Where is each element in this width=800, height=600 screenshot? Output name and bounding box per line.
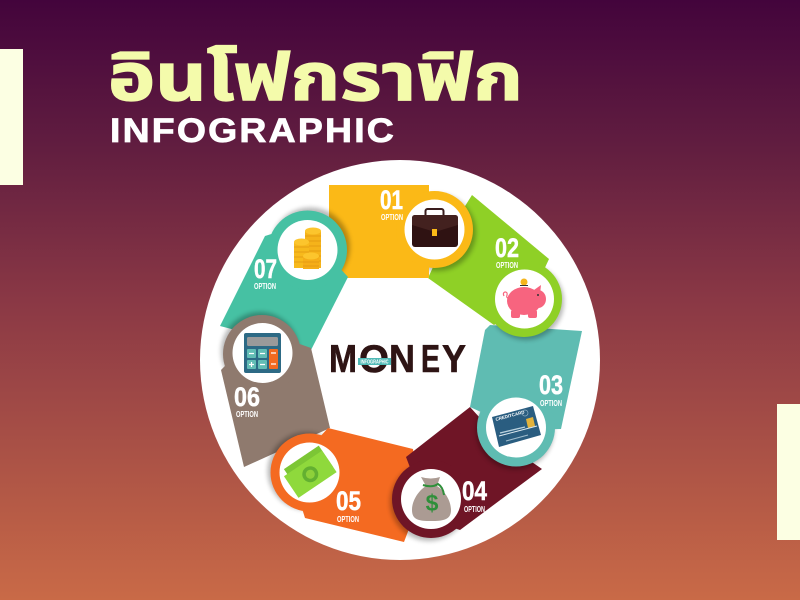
option 02: 02 <box>495 233 519 263</box>
segment 03: credit card <box>470 325 582 470</box>
option 04: OPTION <box>464 505 485 514</box>
icon: money bag: $ <box>426 490 439 516</box>
icon: calculator <box>244 333 281 373</box>
MONEY logo: N <box>389 338 415 381</box>
title: อินโฟกราฟิก <box>108 30 523 130</box>
option 03 <box>539 370 563 408</box>
icon: credit card: CREDITCARD <box>495 409 526 422</box>
option 02: OPTION <box>496 261 518 270</box>
MONEY logo: O <box>359 338 389 381</box>
step numbers and labels <box>234 185 563 524</box>
option 06: 06 <box>234 382 260 412</box>
icon: banknotes <box>281 446 337 498</box>
icon: money bag <box>412 477 451 521</box>
option 03: 03 <box>539 370 563 400</box>
white circle panel <box>200 160 600 560</box>
segment 06: calculator <box>221 312 330 467</box>
icon: credit card <box>492 406 541 447</box>
segment 05: banknotes <box>268 428 420 542</box>
MONEY logo: E <box>421 338 440 381</box>
option 05 <box>336 486 361 524</box>
ribbon 01 base <box>329 185 429 278</box>
option 01 <box>380 185 403 222</box>
segment 07: gold coins <box>220 208 350 350</box>
option 03: OPTION <box>540 399 562 408</box>
icon: briefcase <box>412 209 458 247</box>
right accent bar <box>777 404 800 540</box>
segment 02: piggy bank <box>428 195 564 340</box>
option 07 <box>254 254 277 291</box>
option 04 <box>462 476 487 514</box>
option 01: 01 <box>380 185 403 215</box>
segment 01: briefcase <box>385 185 476 278</box>
MONEY logo <box>329 338 466 381</box>
icon: gold coins <box>294 228 321 269</box>
option 06: OPTION <box>236 410 258 419</box>
option 01: OPTION <box>381 213 403 222</box>
option 05: 05 <box>336 486 361 516</box>
left accent bar <box>0 49 23 185</box>
option 02 <box>495 233 519 270</box>
subtitle: INFOGRAPHIC <box>110 112 396 150</box>
segment 04: money bag <box>390 407 542 541</box>
MONEY logo: Y <box>442 338 466 381</box>
option 07: OPTION <box>254 282 276 291</box>
icon: piggy bank <box>503 278 546 318</box>
option 07: 07 <box>254 254 277 284</box>
option 04: 04 <box>462 476 487 506</box>
MONEY logo: M <box>329 338 357 381</box>
MONEY logo: INFOGRAPHIC <box>360 360 389 366</box>
option 05: OPTION <box>337 515 359 524</box>
